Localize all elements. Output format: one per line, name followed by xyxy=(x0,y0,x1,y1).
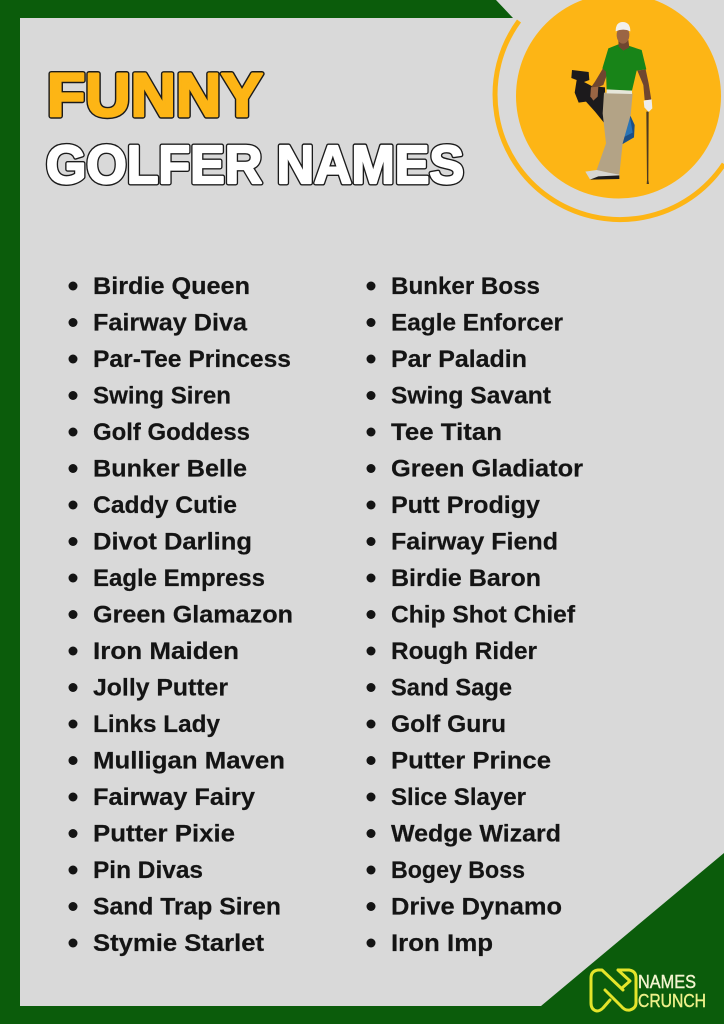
right name list: Tee Titan xyxy=(391,420,502,446)
logo wordmark: NAMES xyxy=(638,972,696,992)
left name list: Swing Siren xyxy=(93,384,231,410)
right name list: Putter Prince xyxy=(391,748,551,774)
trousers xyxy=(597,93,633,175)
title xyxy=(46,61,464,195)
shoes xyxy=(585,170,619,179)
left name list: Jolly Putter xyxy=(93,676,228,702)
left name list: Green Glamazon xyxy=(93,602,293,628)
left name list: Mulligan Maven xyxy=(93,748,285,774)
decorative yellow circle arc xyxy=(495,21,724,220)
yellow circle behind golfer xyxy=(516,0,721,198)
right name list xyxy=(366,274,583,957)
golf bag xyxy=(571,70,635,144)
right name list: Slice Slayer xyxy=(391,785,526,811)
right name list: Bogey Boss xyxy=(391,858,525,884)
logo wordmark xyxy=(638,972,706,1011)
left name list: Fairway Fairy xyxy=(93,785,255,811)
right name list: Par Paladin xyxy=(391,347,527,373)
left name list: Links Lady xyxy=(93,712,220,738)
left name list: Eagle Empress xyxy=(93,566,265,592)
left name list: Stymie Starlet xyxy=(93,931,264,957)
left name list: Bunker Belle xyxy=(93,456,247,482)
left name list: Golf Goddess xyxy=(93,420,250,446)
right name list: Drive Dynamo xyxy=(391,894,562,920)
right name list: Bunker Boss xyxy=(391,274,540,300)
right name list: Putt Prodigy xyxy=(391,493,540,519)
right name list: Rough Rider xyxy=(391,639,537,665)
belt xyxy=(607,89,632,94)
back arm xyxy=(590,67,608,100)
logo wordmark: CRUNCH xyxy=(638,991,706,1011)
title line: FUNNY: FUNNY xyxy=(47,61,263,129)
right name list: Eagle Enforcer xyxy=(391,310,563,336)
left name list: Sand Trap Siren xyxy=(93,894,281,920)
left name list: Caddy Cutie xyxy=(93,493,237,519)
logo mark xyxy=(591,970,636,1011)
title line: GOLFER NAMES: GOLFER NAMES xyxy=(46,135,464,195)
right arm xyxy=(637,69,651,100)
left name list: Par-Tee Princess xyxy=(93,347,291,373)
left name list: Iron Maiden xyxy=(93,639,239,665)
right name list: Fairway Fiend xyxy=(391,530,558,556)
glove xyxy=(644,99,652,112)
left name list: Pin Divas xyxy=(93,858,203,884)
golf club xyxy=(646,112,649,184)
left hand xyxy=(591,87,598,101)
right name list: Swing Savant xyxy=(391,384,551,410)
title line: GOLFER NAMES: GOLFER NAMES xyxy=(46,135,464,195)
right name list: Green Gladiator xyxy=(391,456,583,482)
left name list xyxy=(68,274,293,957)
illustration: golfer with bag and club xyxy=(571,22,652,184)
left name list: Putter Pixie xyxy=(93,822,235,848)
left name list: Divot Darling xyxy=(93,530,252,556)
right name list: Sand Sage xyxy=(391,676,512,702)
left name list: Fairway Diva xyxy=(93,310,248,336)
right name list: Golf Guru xyxy=(391,712,506,738)
right name list: Iron Imp xyxy=(391,931,493,957)
right name list: Birdie Baron xyxy=(391,566,541,592)
neck and head xyxy=(618,40,629,51)
left name list: Birdie Queen xyxy=(93,274,250,300)
right name list: Chip Shot Chief xyxy=(391,602,575,628)
right name list: Wedge Wizard xyxy=(391,822,561,848)
white cap xyxy=(616,22,630,31)
logo: Names Crunch xyxy=(591,970,706,1011)
green shirt xyxy=(602,44,646,91)
title line: FUNNY: FUNNY xyxy=(47,61,263,129)
